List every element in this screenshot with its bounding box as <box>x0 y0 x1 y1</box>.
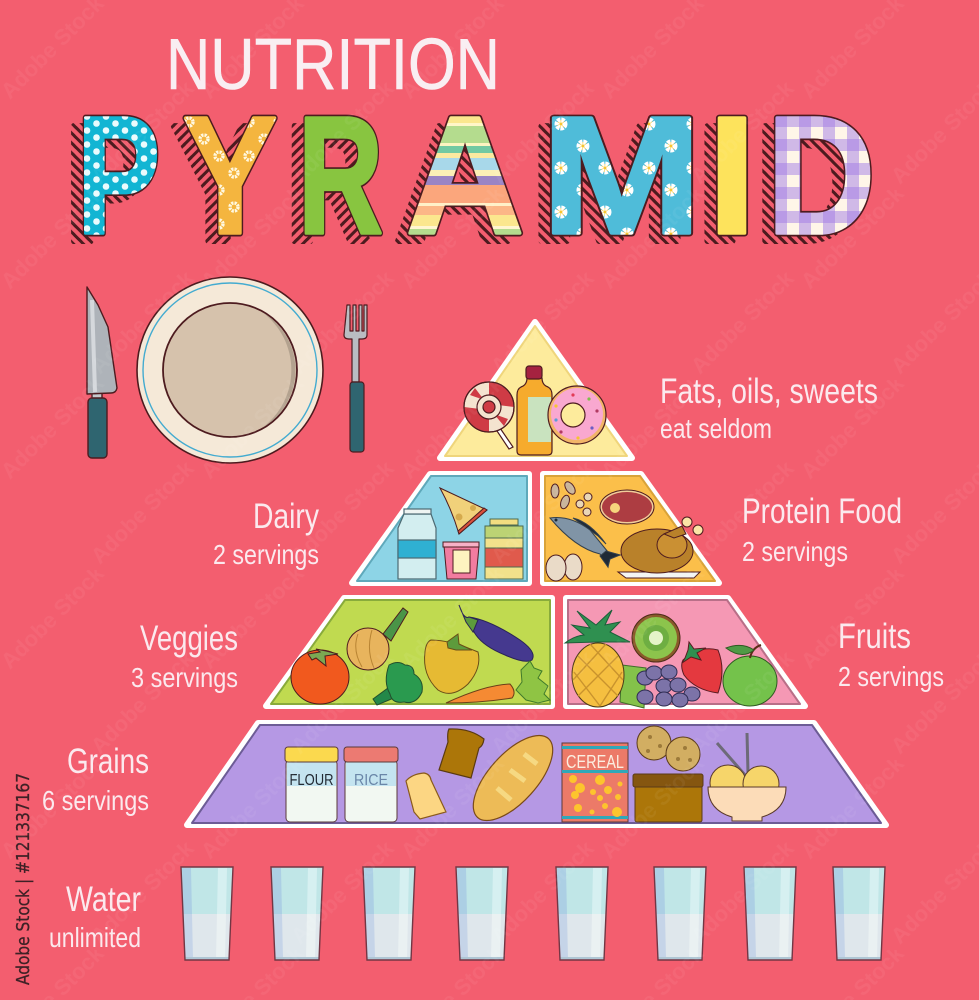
icon: carrot with greens <box>446 661 550 703</box>
letter M: M <box>529 91 690 277</box>
letter D: D <box>767 83 875 269</box>
icon: cereal box: CEREAL <box>566 752 624 772</box>
label: dairy: 2 servings <box>213 539 319 570</box>
glass 4 <box>456 867 508 960</box>
letter P: P <box>77 83 160 269</box>
glass 2 <box>271 867 323 960</box>
pyramid tier: protein food <box>543 474 719 583</box>
icon: noodle bowl <box>708 733 786 821</box>
letter A: A <box>394 91 512 277</box>
icon: brown bread slice <box>439 729 484 778</box>
icon: apple <box>723 645 777 706</box>
stock id sidebar: Adobe Stock | #121337167 <box>13 773 34 985</box>
icon: lollipop <box>464 382 514 449</box>
label: fats, oils, sweets <box>660 372 878 444</box>
icon: grapes <box>620 665 700 708</box>
letter R: R <box>298 83 383 269</box>
icon: toast slice <box>406 773 446 819</box>
icon: flour jar <box>285 747 338 822</box>
icon: fish <box>550 518 620 567</box>
icon: rice jar: RICE <box>354 772 388 789</box>
icon: kiwi <box>632 614 680 662</box>
glass 7 <box>744 867 796 960</box>
letter D: D <box>767 83 875 269</box>
label: water: unlimited <box>49 922 141 953</box>
letter M: M <box>541 83 702 269</box>
icon: baguette <box>460 723 566 833</box>
label: protein food <box>742 492 902 567</box>
label: fats, oils, sweets: eat seldom <box>660 413 772 444</box>
icon: fork <box>344 305 367 452</box>
label: protein food: Protein Food <box>742 492 902 531</box>
icon: rice jar <box>344 747 398 822</box>
icon: eggplant <box>459 605 533 661</box>
icon: brown box <box>633 774 703 822</box>
pyramid tier: veggies <box>266 598 552 706</box>
icon: milk carton <box>398 509 436 579</box>
icon: oil bottle <box>517 366 552 455</box>
letter D: D <box>755 91 863 277</box>
icon: nuts <box>551 480 592 516</box>
letter I: I <box>696 91 744 277</box>
letter A: A <box>406 83 524 269</box>
label: protein food: 2 servings <box>742 536 848 567</box>
icon: cookies <box>637 726 700 771</box>
letter P: P <box>65 91 148 277</box>
label: dairy: Dairy <box>253 497 319 536</box>
icon: roast turkey on plate <box>618 517 703 578</box>
icon: plate <box>137 277 323 463</box>
icon: tomato <box>291 649 349 704</box>
label: veggies: 3 servings <box>131 662 238 693</box>
label: veggies <box>131 619 238 693</box>
icon: strawberry <box>682 642 722 693</box>
icon: pineapple <box>565 610 630 707</box>
icon: donut <box>548 386 606 444</box>
icon: steak <box>600 490 654 524</box>
label: dairy <box>213 497 319 570</box>
icon: cereal box <box>562 743 628 822</box>
label: fruits: Fruits <box>838 617 911 656</box>
title: PYRAMID patterned letters <box>65 83 875 277</box>
label: grains: Grains <box>67 742 149 781</box>
glass 8 <box>833 867 885 960</box>
water glasses row <box>181 867 885 960</box>
label: grains: 6 servings <box>42 785 149 816</box>
label: grains <box>42 742 149 816</box>
letter I: I <box>708 83 756 269</box>
pyramid tier: fats, oils, sweets <box>440 322 632 458</box>
glass 5 <box>556 867 608 960</box>
icon: flour jar: FLOUR <box>290 772 334 789</box>
letter A: A <box>406 83 524 269</box>
glass 3 <box>363 867 415 960</box>
icon: onion <box>347 608 408 670</box>
letter M: M <box>541 83 702 269</box>
letter R: R <box>298 83 383 269</box>
title: NUTRITION: NUTRITION <box>166 25 500 105</box>
icon: jar <box>485 519 523 579</box>
letter P: P <box>77 83 160 269</box>
letter I: I <box>708 83 756 269</box>
pyramid tier: grains <box>187 723 886 833</box>
letter Y: Y <box>171 91 265 277</box>
icon: yogurt <box>443 542 479 579</box>
pyramid tier: fruits <box>565 598 805 708</box>
label: water: Water <box>66 880 141 919</box>
icon: cheese <box>440 488 487 534</box>
glass 1 <box>181 867 233 960</box>
letter Y: Y <box>183 83 277 269</box>
icon: eggs <box>546 554 582 581</box>
label: fats, oils, sweets: Fats, oils, sweets <box>660 372 878 411</box>
label: water <box>49 880 141 953</box>
label: fruits <box>838 617 944 692</box>
glass 6 <box>654 867 706 960</box>
letter R: R <box>286 91 371 277</box>
label: veggies: Veggies <box>140 619 238 658</box>
icon: yellow pepper <box>425 634 479 693</box>
pyramid tier: dairy <box>352 474 529 583</box>
label: fruits: 2 servings <box>838 661 944 692</box>
icon: knife <box>87 287 117 458</box>
letter Y: Y <box>183 83 277 269</box>
icon: broccoli <box>373 662 422 705</box>
